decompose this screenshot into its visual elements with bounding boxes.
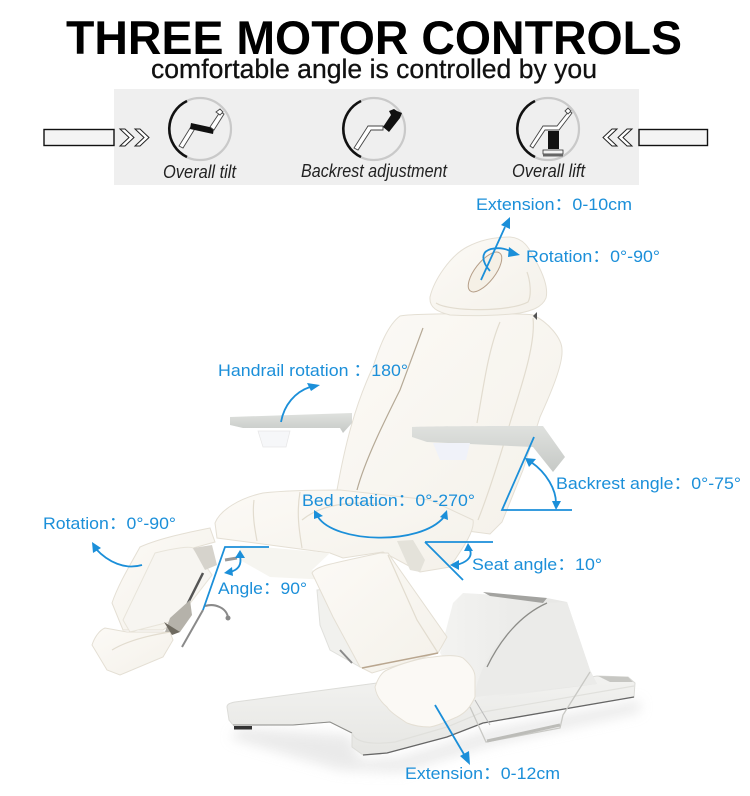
subtitle: comfortable angle is controlled by you: [151, 54, 597, 84]
arrow: backrest angle: [502, 437, 572, 510]
caption: overall tilt: Overall tilt: [163, 162, 237, 182]
near leg bracket: [317, 585, 380, 667]
near foot pad: [375, 656, 475, 727]
panel: motor controls: [44, 89, 708, 185]
left armrest: [230, 413, 352, 433]
leg mechanism: [164, 545, 237, 647]
right cup: [433, 443, 470, 460]
backrest: [337, 314, 562, 534]
icon: backrest adjustment: [343, 98, 405, 160]
star base: [227, 676, 635, 755]
right connector bar: [639, 130, 708, 146]
right armrest: [412, 426, 565, 472]
label: leg rotation: Rotation：0°-90°: [43, 514, 176, 533]
label: backrest angle: Backrest angle：0°-75°: [556, 474, 741, 493]
arrow: leg rotation: [92, 542, 142, 567]
arrow: leg angle: [203, 547, 269, 610]
seat: [215, 490, 473, 572]
arrow: handrail rotation: [281, 383, 320, 422]
chevrons pointing left: [603, 129, 632, 146]
arrow: seat angle: [425, 542, 493, 580]
headrest: [430, 237, 547, 316]
arrow: headrest extension: [481, 217, 510, 280]
icon: overall lift: [517, 98, 579, 160]
hand controller: [397, 540, 425, 572]
left cup: [258, 431, 290, 447]
power cord: [470, 672, 590, 742]
label: bed rotation: Bed rotation：0°-270°: [302, 491, 475, 510]
title: THREE MOTOR CONTROLS: [66, 11, 682, 64]
caption: overall lift: Overall lift: [512, 161, 586, 181]
headrest hinge: [533, 312, 537, 320]
lowered foot pad: [92, 628, 173, 675]
arrow: foot extension: [435, 705, 470, 765]
near leg pad: [312, 553, 447, 673]
floor shadow: [230, 700, 640, 772]
label: headrest rotation: Rotation：0°-90°: [526, 247, 660, 266]
label: extension top: Extension：0-10cm: [476, 195, 632, 214]
label: handrail rotation: Handrail rotation ：180°: [218, 361, 408, 380]
icon: overall tilt: [169, 98, 231, 160]
caption: backrest adjustment: Backrest adjustment: [301, 161, 448, 181]
label: seat angle: Seat angle：10°: [472, 555, 602, 574]
lowered leg pad: [112, 528, 215, 630]
left connector bar: [44, 130, 114, 146]
arrow: bed rotation: [314, 510, 448, 538]
label: extension bottom: Extension：0-12cm: [405, 764, 560, 783]
chair photo: [92, 237, 640, 772]
label: leg angle: Angle：90°: [218, 579, 307, 598]
base pedestal: [440, 593, 597, 700]
arrow: headrest rotation: [483, 247, 520, 271]
chevrons pointing right: [120, 129, 149, 146]
